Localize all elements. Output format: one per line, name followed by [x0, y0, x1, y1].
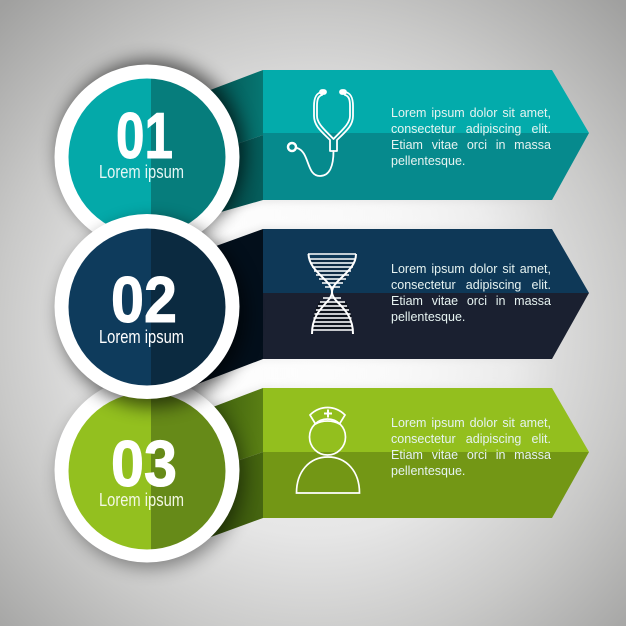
text block 03: pellentesque.: [391, 464, 465, 478]
text block 01: Lorem ipsum dolor sit amet,: [391, 106, 551, 120]
circle shadows: [58, 60, 244, 568]
icon: stethoscope: [288, 90, 353, 176]
text block 01: [391, 106, 551, 168]
icon: DNA helix: [308, 254, 356, 334]
text block 03: Lorem ipsum dolor sit amet,: [391, 416, 551, 430]
text block 02: Etiam vitae orci in massa: [391, 294, 551, 308]
circle 02 shadow: [60, 221, 246, 407]
text block 02: Lorem ipsum dolor sit amet,: [391, 262, 551, 276]
circle 02: [54, 214, 240, 399]
panel: band 03: [200, 388, 589, 541]
number 02: 02: [111, 263, 177, 336]
number 01: 01: [116, 99, 173, 172]
label 02: Lorem ipsum: [99, 326, 184, 347]
text block 02: consectetur adipiscing elit.: [391, 278, 551, 292]
icon: nurse: [296, 408, 360, 493]
text block 03: [391, 416, 551, 478]
number 03: 03: [111, 427, 177, 500]
text block 03: Etiam vitae orci in massa: [391, 448, 551, 462]
text block 02: [391, 262, 551, 324]
text block 01: consectetur adipiscing elit.: [391, 122, 551, 136]
label 03: Lorem ipsum: [99, 489, 184, 510]
light glow between bands: [195, 203, 560, 405]
text block 02: pellentesque.: [391, 310, 465, 324]
label 01: Lorem ipsum: [99, 161, 184, 182]
text block 01: pellentesque.: [391, 154, 465, 168]
panel: band 02: [195, 229, 589, 385]
panel: band 01: [200, 70, 589, 218]
text block 03: consectetur adipiscing elit.: [391, 432, 551, 446]
circle 01: [54, 64, 240, 250]
circle 03: [54, 378, 240, 562]
text block 01: Etiam vitae orci in massa: [391, 138, 551, 152]
